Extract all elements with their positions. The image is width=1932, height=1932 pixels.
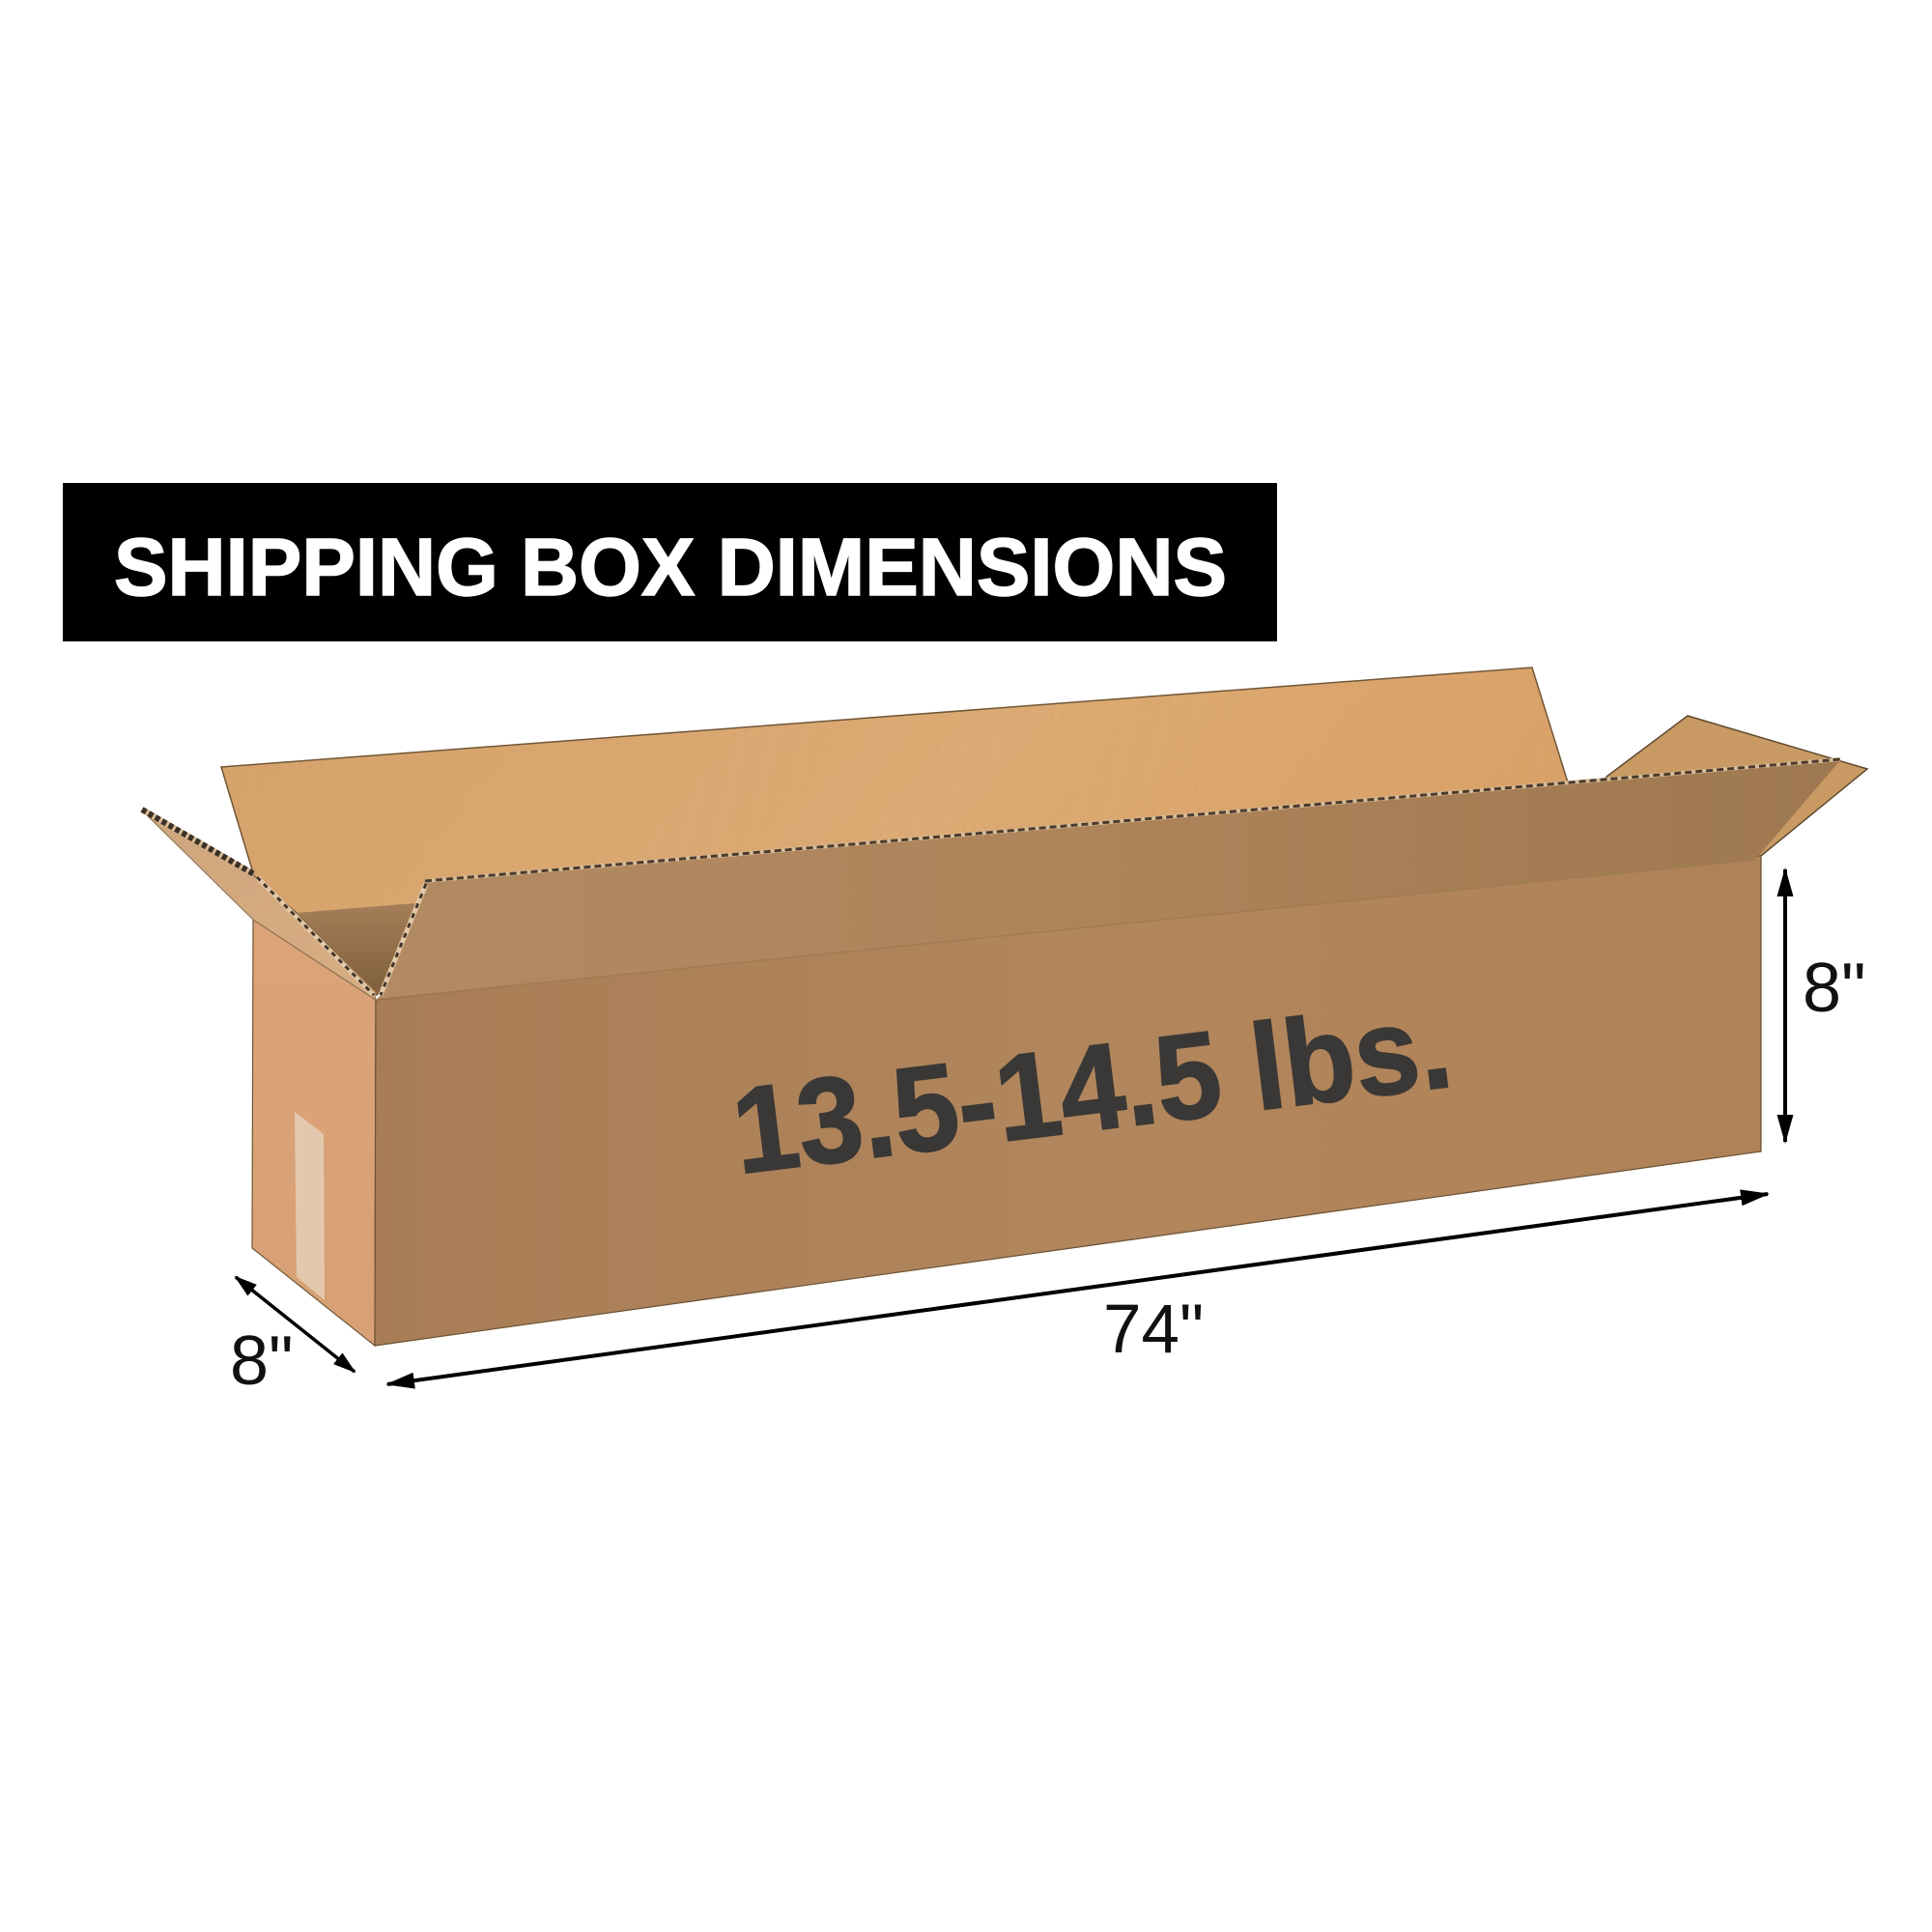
title banner xyxy=(63,483,1277,641)
weight label: 13.5-14.5 lbs. xyxy=(725,977,1459,1200)
flap fold shadow xyxy=(382,860,1755,999)
length label: 74" xyxy=(1103,1292,1204,1368)
front flap xyxy=(376,760,1840,1000)
back flap xyxy=(221,668,1568,995)
corrugated edges xyxy=(142,759,1840,995)
width label: 8" xyxy=(230,1322,294,1400)
right end flap xyxy=(1606,716,1867,856)
arrow: length xyxy=(387,1194,1768,1384)
arrow: height xyxy=(1783,869,1787,1142)
title text: SHIPPING BOX DIMENSIONS xyxy=(114,522,1227,612)
left side panel xyxy=(252,920,376,1346)
left end flap xyxy=(142,810,376,1000)
packing tape xyxy=(295,1112,325,1300)
front panel xyxy=(375,856,1761,1346)
shipping box illustration xyxy=(142,668,1867,1346)
height label: 8" xyxy=(1803,950,1866,1027)
box interior xyxy=(297,903,415,995)
arrow: width xyxy=(236,1277,355,1372)
